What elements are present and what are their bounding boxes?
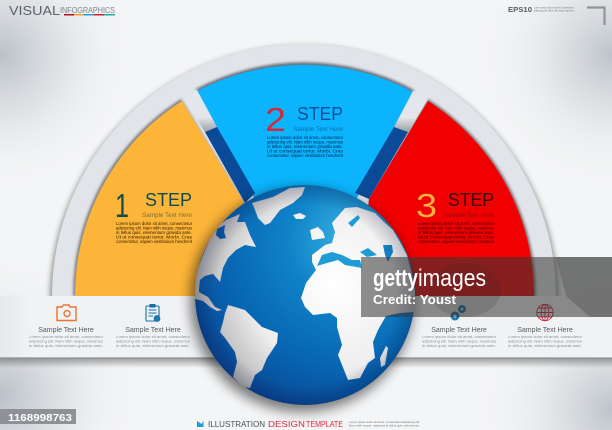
step 2 text: consectetur, sapien vestibulum hendrerit — [267, 153, 344, 158]
item 1: Lorem ipsum dolor sit amet, consectetur — [29, 334, 104, 339]
step 2 text: Ut ut consequat tortor. Morbi. Cras — [267, 148, 344, 154]
eurasia and africa — [301, 207, 416, 380]
step 1 text: Lorem ipsum dolor sit amet, consectetur — [116, 221, 192, 226]
info strip — [0, 296, 612, 368]
corner bracket — [587, 8, 604, 25]
step 3 text — [416, 187, 495, 244]
item 2: in tellus quis, elementum gravida ante. — [116, 343, 190, 348]
hudson bay — [216, 225, 226, 239]
step 1 text: adipiscing elit. Nam nibh neque, maximus — [116, 226, 193, 230]
step 2 text: in tellus quis, elementum gravida ante. — [267, 144, 343, 149]
watermark: getty — [373, 265, 419, 292]
brand header — [9, 4, 115, 18]
greenland — [252, 187, 305, 225]
image id tag — [0, 409, 76, 424]
dark band right — [355, 91, 428, 199]
icon: web globe — [537, 304, 553, 321]
item 3 — [422, 327, 497, 348]
item 1 — [29, 327, 104, 348]
step 1 text: Sample Text Here — [142, 212, 192, 219]
icon: gears — [450, 305, 466, 320]
icon: clipboard — [146, 304, 160, 321]
item 3: Sample Text Here — [431, 327, 487, 334]
dark band left — [183, 90, 255, 203]
step 3 text: Sample Text Here — [444, 212, 494, 219]
step 3 text: 3 — [416, 187, 437, 224]
footer title: ILLUSTRATION — [208, 420, 265, 429]
step 2 text: adipiscing elit. Nam nibh neque, maximus — [267, 140, 344, 144]
step 3 text: consectetur, sapien vestibulum hendrerit — [418, 239, 495, 244]
step 1 text: in tellus quis, elementum gravida ante. — [116, 230, 192, 235]
item 3: Lorem ipsum dolor sit amet, consectetur — [422, 334, 497, 339]
step 2 text: 2 — [265, 101, 286, 138]
footer title: Nam nibh neque, maximus in tellus quis, elementum. — [349, 424, 420, 428]
footer title: DESIGN — [268, 420, 305, 429]
item 4: in tellus quis, elementum gravida ante. — [508, 343, 582, 348]
item 4 — [508, 327, 583, 348]
british isles — [310, 227, 325, 240]
watermark: Credit: Youst — [373, 292, 457, 307]
item 1: adipiscing elit. Nam nibh neque, maximus — [29, 338, 103, 344]
caspian sea — [383, 245, 393, 262]
footer title: Lorem ipsum dolor sit amet, consectetur adipiscing elit. — [349, 420, 420, 424]
step 3 text: STEP — [448, 190, 494, 210]
step 2 text: Sample Text Here — [293, 126, 343, 133]
watermark — [361, 257, 612, 317]
icon: camera — [57, 305, 76, 320]
gulf of mexico — [199, 274, 219, 294]
north america — [195, 214, 256, 311]
item 1: Sample Text Here — [38, 327, 94, 334]
watermark: images — [418, 265, 486, 292]
item 4: Lorem ipsum dolor sit amet, consectetur — [508, 334, 583, 339]
item 3: in tellus quis, elementum gravida ante. — [422, 343, 496, 348]
item 2 — [116, 327, 191, 348]
wedge 1: yellow — [73, 99, 250, 296]
step 3 text: adipiscing elit. Nam nibh neque, maximus — [418, 226, 495, 230]
item 3: adipiscing elit. Nam nibh neque, maximus — [422, 338, 496, 344]
item 1: in tellus quis, elementum gravida ante. — [29, 343, 103, 348]
item 4: Sample Text Here — [517, 327, 573, 334]
step 1 text: 1 — [115, 187, 129, 224]
EPS10 label: EPS10 — [508, 5, 532, 14]
step 1 text: consectetur, sapien vestibulum hendrerit — [116, 239, 193, 244]
step 3 text: Ut ut consequat tortor. Morbi. Cras — [418, 234, 495, 240]
EPS10 label — [508, 5, 575, 14]
item 2: Sample Text Here — [125, 327, 181, 334]
step 1 text: Ut ut consequat tortor. Morbi. Cras — [116, 234, 193, 240]
brand header: VISUAL — [9, 4, 60, 18]
step 2 text: STEP — [297, 104, 343, 124]
baltic sea — [348, 215, 360, 227]
EPS10 label: Lorem ipsum dolor sit amet, consectetur — [534, 6, 574, 10]
brand header: INFOGRAPHICS — [60, 6, 115, 15]
step 1 text: STEP — [145, 190, 192, 210]
step 3 text: Lorem ipsum dolor sit amet, consectetur — [418, 221, 494, 226]
iceland — [293, 213, 306, 219]
EPS10 label: adipiscing elit. Nam nibh neque maximus — [534, 8, 575, 12]
footer title — [197, 420, 420, 429]
item 2: Lorem ipsum dolor sit amet, consectetur — [116, 334, 191, 339]
globe — [188, 185, 416, 405]
step 2 text — [265, 101, 344, 158]
mediterranean — [317, 252, 362, 268]
item 2: adipiscing elit. Nam nibh neque, maximus — [116, 338, 190, 344]
item 4: adipiscing elit. Nam nibh neque, maximus — [508, 338, 582, 344]
image id tag: 1168998763 — [8, 412, 72, 424]
wedge 2: blue — [196, 62, 414, 200]
footer title: TEMPLATE — [306, 420, 343, 429]
black sea — [360, 248, 377, 257]
madagascar — [380, 346, 388, 367]
step 1 text — [115, 187, 193, 244]
south america — [220, 305, 278, 388]
semicircle ring — [50, 44, 558, 300]
globe shadow — [190, 188, 414, 412]
step 3 text: in tellus quis, elementum gravida ante. — [418, 230, 494, 235]
wedge 3: red — [360, 99, 536, 296]
step 2 text: Lorem ipsum dolor sit amet, consectetur — [267, 135, 343, 140]
